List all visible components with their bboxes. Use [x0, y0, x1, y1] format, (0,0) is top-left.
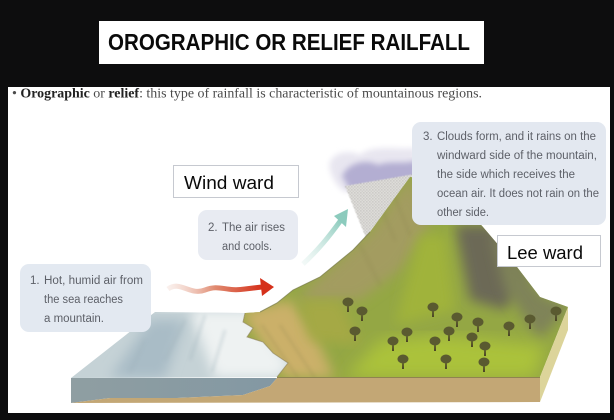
- intro sentence: • Orographic or relief: this type of rainfall is characteristic of mountainous regions.: [12, 86, 482, 102]
- callout 2: 2.: [208, 222, 218, 234]
- arrow: rising air: [303, 209, 348, 264]
- land front edge: [277, 376, 540, 378]
- callout 1: a mountain.: [44, 313, 104, 325]
- arrow: hot humid air: [168, 278, 274, 296]
- label: wind ward: [174, 166, 298, 198]
- callout 2: The air rises: [222, 222, 285, 234]
- label: lee ward: [498, 236, 600, 266]
- rain: [345, 174, 415, 238]
- cloud: [329, 148, 420, 192]
- land side face: [540, 307, 568, 402]
- ridge edge: [260, 232, 370, 312]
- land front face: [71, 377, 540, 403]
- sea front face: [71, 378, 277, 403]
- callout 1: the sea reaches: [44, 294, 123, 306]
- callout 1: 1.: [30, 275, 40, 287]
- callout 2: [198, 210, 298, 260]
- callout 3: Clouds form, and it rains on the: [437, 131, 596, 143]
- callout 3: the side which receives the: [437, 169, 575, 181]
- label: wind ward: Wind ward: [184, 173, 274, 193]
- callout 1: Hot, humid air from: [44, 275, 143, 287]
- callout 3: ocean air. It does not rain on the: [437, 188, 599, 200]
- callout 3: [412, 122, 606, 225]
- coastline: [243, 313, 288, 377]
- callout 2: and cools.: [222, 241, 272, 253]
- callout 3: windward side of the mountain,: [436, 150, 597, 162]
- title: OROGRAPHIC OR RELIEF RAILFALL: [108, 29, 470, 55]
- callout 1: [20, 264, 151, 332]
- title: [99, 21, 484, 64]
- mountain: [235, 170, 575, 380]
- panel: relief rainfall diagram: [8, 86, 610, 413]
- trees: [342, 298, 562, 372]
- callout 3: other side.: [437, 207, 489, 219]
- label: lee ward: Lee ward: [507, 243, 583, 263]
- sea: [70, 310, 295, 380]
- callout 3: 3.: [423, 131, 433, 143]
